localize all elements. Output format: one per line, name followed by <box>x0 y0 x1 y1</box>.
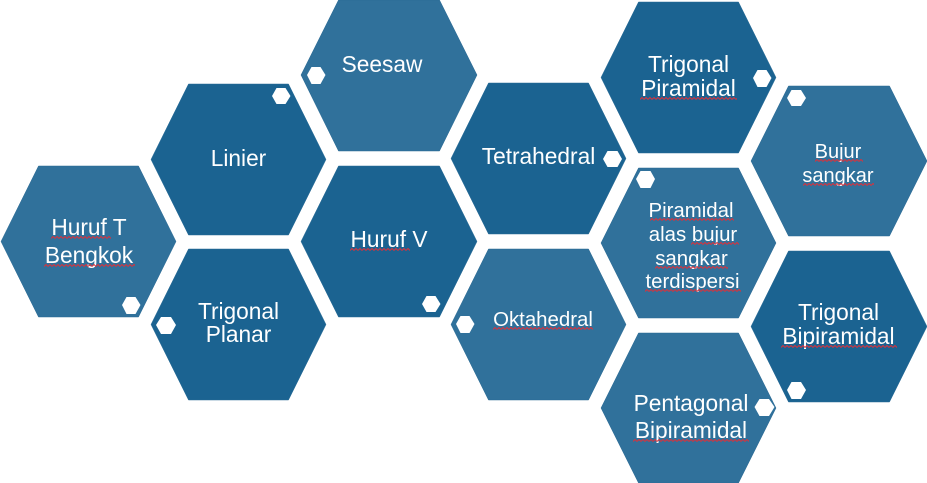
hexagon: Trigonal Bipiramidal: Bipiramidal <box>782 323 895 349</box>
hexagon: Huruf V <box>301 166 477 317</box>
hexagon: Trigonal Planar: Planar <box>206 321 272 347</box>
hexagon: Linier <box>151 84 326 235</box>
hexagon: Piramidal alas bujur sangkar terdispersi: terdispersi <box>645 271 740 293</box>
hexagon: Trigonal Piramidal: Trigonal <box>648 51 729 77</box>
hexagon: Oktahedral <box>451 249 626 400</box>
hexagon: Huruf T Bengkok <box>1 166 176 317</box>
hexagon: Seesaw <box>301 0 477 151</box>
hexagon: Oktahedral: Oktahedral <box>493 309 593 331</box>
hexagon: Piramidal alas bujur sangkar terdispersi: sangkar <box>655 248 728 270</box>
hexagon: Huruf T Bengkok: Bengkok <box>45 242 134 268</box>
hexagon: Tetrahedral: Tetrahedral <box>482 143 595 169</box>
hexagon: Piramidal alas bujur sangkar terdispersi: alas bujur <box>649 224 737 246</box>
hexagon: Trigonal Planar <box>151 249 326 400</box>
hexagon: Trigonal Planar: Trigonal <box>198 298 279 324</box>
hexagon: Trigonal Bipiramidal: Trigonal <box>798 299 879 325</box>
hexagon: Pentagonal Bipiramidal: Pentagonal <box>634 390 748 416</box>
hexagon: Pentagonal Bipiramidal <box>601 333 776 483</box>
hexagon: Seesaw: Seesaw <box>342 51 423 77</box>
hexagon: Linier: Linier <box>211 145 267 171</box>
hexagon: Piramidal alas bujur sangkar terdispersi <box>601 168 776 318</box>
hexagon: Bujur sangkar <box>751 86 927 236</box>
hexagon: Tetrahedral <box>451 83 626 234</box>
hexagon: Trigonal Bipiramidal <box>751 251 927 402</box>
hexagon: Pentagonal Bipiramidal: Bipiramidal <box>635 417 747 443</box>
hexagon: Bujur sangkar: sangkar <box>802 165 874 187</box>
label: Huruf T Bengkok: Huruf T <box>51 214 127 240</box>
hexagon: Piramidal alas bujur sangkar terdispersi: Piramidal <box>648 200 734 222</box>
hexagon: Bujur sangkar: Bujur <box>815 141 862 163</box>
hexagon: Trigonal Piramidal <box>601 2 776 153</box>
hexagon: Trigonal Piramidal: Piramidal <box>641 75 736 101</box>
hexagon: Huruf V: Huruf V <box>351 226 428 252</box>
